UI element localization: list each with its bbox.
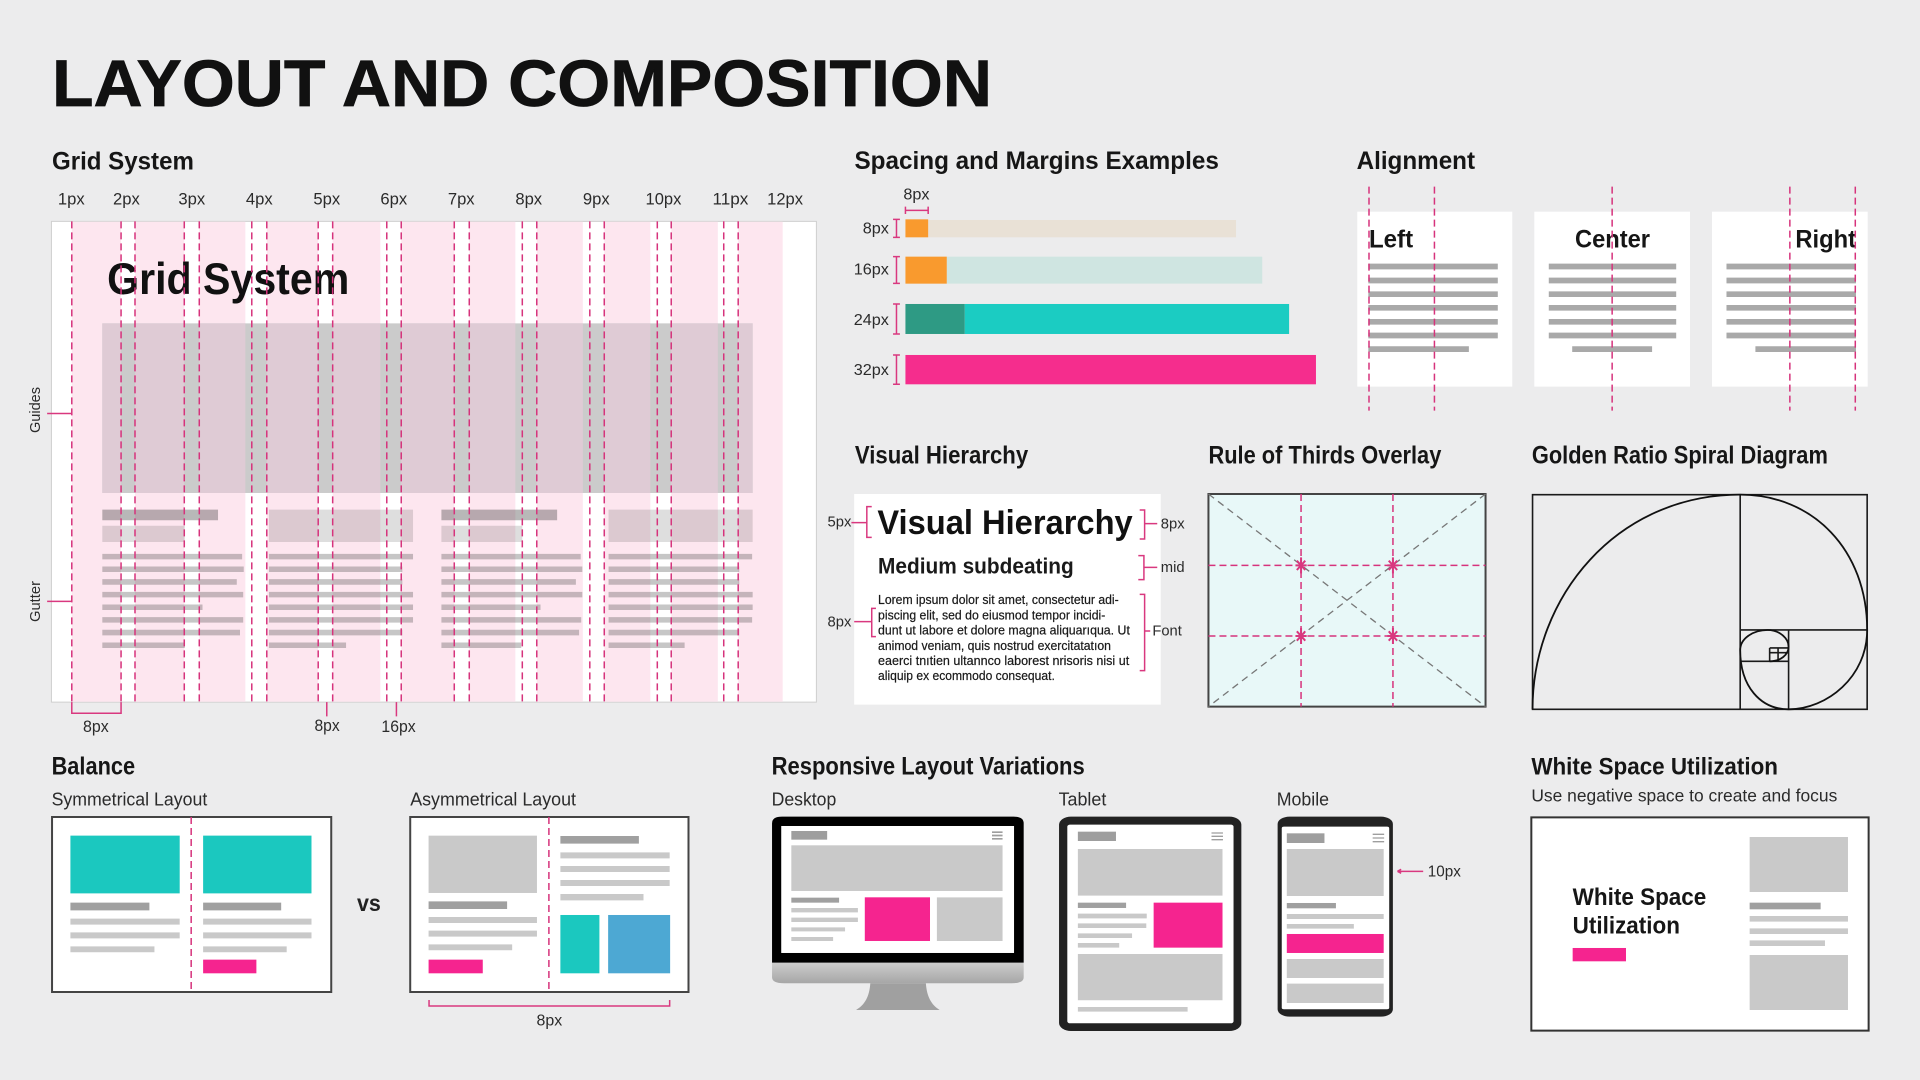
column header blocks — [102, 510, 753, 542]
callout: 10px — [1397, 863, 1461, 881]
spacing row 32px — [854, 355, 1316, 384]
specimen body text: aliquip ex ecommodo consequat. — [878, 669, 1055, 683]
symmetrical card — [52, 817, 331, 992]
card headline: Utilization — [1573, 912, 1680, 939]
column labels: 9px — [583, 190, 610, 209]
panel: visual hierarchy: Lorem ipsum dolor sit amet, consectetur adi- — [878, 593, 1119, 607]
card: left: Left — [1369, 226, 1413, 253]
label: asymmetrical: Asymmetrical Layout — [410, 789, 577, 809]
column labels: 10px — [646, 190, 681, 209]
top measure: 8px — [903, 186, 930, 203]
hierarchy annotations: 5px — [828, 514, 851, 530]
hierarchy annotations: 8px — [828, 614, 851, 630]
card side content — [1750, 837, 1848, 1010]
card: center — [1534, 212, 1690, 387]
dashed column guides — [72, 221, 738, 702]
top measure — [903, 186, 930, 214]
measurement annotations: 8px — [83, 718, 109, 736]
alignment guides — [1369, 187, 1855, 411]
column labels: 4px — [246, 190, 273, 209]
column labels: 8px — [515, 190, 542, 209]
title: LAYOUT AND COMPOSITION — [52, 46, 992, 120]
card headline — [1573, 884, 1706, 939]
panel: visual hierarchy: Medium subdeating — [878, 553, 1074, 578]
card headline: White Space — [1573, 884, 1706, 911]
panel: rule of thirds: Rule of Thirds Overlay — [1208, 441, 1442, 469]
hierarchy annotations: Font — [1152, 623, 1182, 639]
asymmetrical card — [410, 817, 688, 992]
column labels: 2px — [113, 190, 140, 209]
specimen body text: piscing elit, sed do eiusmod tempor incidi- — [878, 608, 1105, 622]
card: left — [1357, 212, 1512, 387]
panel: responsive layouts — [772, 753, 1461, 1031]
text: 8px — [1161, 516, 1185, 532]
device labels: Mobile — [1277, 789, 1329, 809]
white space card — [1531, 817, 1869, 1031]
column labels: 11px — [712, 190, 748, 209]
panel: balance — [52, 753, 688, 1029]
panel: visual hierarchy: Visual Hierarchy — [877, 503, 1133, 541]
card: center: Center — [1575, 226, 1650, 253]
spacing row 16px: 16px — [854, 260, 889, 278]
panel: white space — [1531, 753, 1869, 1031]
device: tablet — [1059, 817, 1241, 1031]
heading: white space: White Space Utilization — [1531, 753, 1778, 780]
spacing row 16px — [854, 257, 1262, 284]
column text lines — [102, 554, 753, 648]
text: mid — [1161, 559, 1185, 576]
panel: golden ratio — [1532, 441, 1867, 709]
spacing row 24px — [854, 304, 1289, 334]
subheading: Use negative space to create and focus — [1531, 786, 1838, 806]
width measure: 8px — [536, 1012, 563, 1029]
measurement annotations: 8px — [314, 718, 340, 735]
thirds frame — [1208, 494, 1486, 707]
column labels: 1px — [58, 190, 85, 209]
width measure — [429, 1000, 670, 1029]
device labels: Desktop — [772, 789, 836, 809]
panel: grid system — [47, 148, 816, 736]
power points — [1295, 557, 1399, 644]
heading: grid system: Grid System — [52, 148, 194, 175]
panel: visual hierarchy: eaerci tnıtien ultannco laborest nrisoris nisi ut — [878, 654, 1129, 668]
measurement annotations — [47, 414, 416, 736]
device: desktop monitor — [772, 817, 1024, 1010]
card button — [1573, 948, 1626, 961]
thirds lines — [1208, 494, 1486, 707]
hierarchy annotations — [828, 507, 1185, 671]
measurement annotations: 16px — [381, 718, 416, 736]
sample heading in grid: Grid System — [107, 255, 349, 304]
column labels: 12px — [767, 190, 803, 209]
device labels — [772, 789, 1329, 809]
spacing row 8px: 8px — [863, 219, 889, 237]
grid canvas — [51, 221, 816, 702]
label: guides: Guides — [27, 387, 44, 433]
specimen card — [854, 494, 1161, 705]
column labels: 7px — [448, 190, 475, 209]
heading: responsive: Responsive Layout Variations — [772, 753, 1085, 780]
device labels: Tablet — [1059, 789, 1107, 809]
spacing row 8px — [863, 219, 1236, 237]
panel: rule of thirds — [1208, 441, 1486, 707]
panel: visual hierarchy: Visual Hierarchy — [855, 441, 1028, 469]
label: gutter: Gutter — [27, 581, 44, 622]
golden rectangle subdivisions — [1533, 495, 1867, 709]
label: symmetrical: Symmetrical Layout — [52, 789, 208, 809]
spacing row 24px: 24px — [854, 310, 889, 329]
heading: balance: Balance — [52, 753, 135, 780]
panel: visual hierarchy: dunt ut labore et dolore magna aliquarıqua. Ut — [878, 624, 1130, 638]
pink grid columns — [72, 222, 783, 702]
versus label: vs — [357, 890, 381, 916]
column labels: 6px — [380, 190, 407, 209]
spacing row 32px: 32px — [854, 360, 889, 379]
panel: alignment — [1357, 146, 1868, 411]
column labels: 5px — [313, 190, 340, 209]
diagonals — [1208, 494, 1486, 707]
specimen body text — [878, 593, 1130, 683]
panel: spacing and margins: Spacing and Margins Examples — [854, 146, 1219, 175]
column labels — [58, 190, 803, 209]
panel: spacing and margins — [854, 146, 1316, 384]
column labels: 3px — [178, 190, 205, 209]
panel: visual hierarchy: animod veniam, quis nostrud exercitatatıon — [878, 639, 1111, 653]
hero block — [102, 323, 753, 493]
panel: alignment: Alignment — [1357, 146, 1475, 175]
panel: visual hierarchy — [828, 441, 1185, 705]
callout: 10px: 10px — [1428, 863, 1461, 881]
device: mobile — [1278, 817, 1393, 1017]
spiral — [1533, 495, 1867, 709]
card: right — [1712, 212, 1868, 387]
